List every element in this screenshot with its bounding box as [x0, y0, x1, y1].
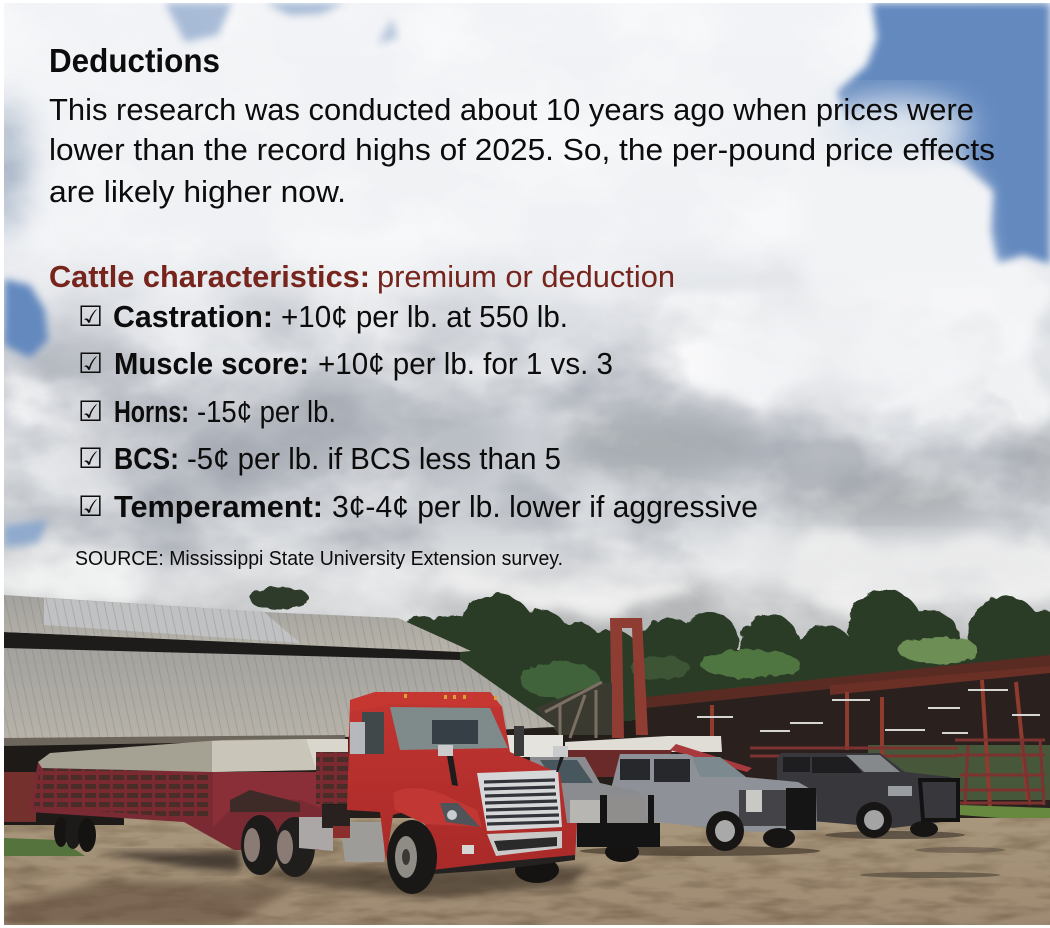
wooden lean-to — [535, 682, 612, 738]
shed on right — [640, 655, 1050, 820]
trailer body — [29, 762, 322, 850]
green gap behind shed — [868, 745, 1050, 800]
barn lower roof — [4, 648, 555, 741]
cab and hood — [347, 692, 577, 872]
item: castration — [78, 300, 568, 334]
item: muscle score: +10¢ per lb. for 1 vs. 3 — [318, 347, 613, 381]
gooseneck — [213, 772, 320, 828]
base behind scene — [124, 650, 738, 818]
item: muscle score — [78, 347, 613, 381]
barn — [4, 595, 555, 825]
ground — [4, 818, 1050, 925]
item: castration: ☑ — [78, 300, 103, 333]
item: horns — [78, 395, 336, 429]
white trailer tops behind trucks — [306, 735, 752, 777]
visor lights — [404, 694, 497, 700]
ground texture — [4, 818, 1050, 925]
silver pickup truck — [612, 754, 817, 851]
grass — [960, 805, 1050, 818]
sky — [0, 3, 1050, 663]
grille — [477, 770, 562, 831]
trailer canopy — [38, 739, 316, 772]
blue sky: lower left gap — [4, 520, 48, 547]
subheading: cattle characteristics: Cattle characteristics: — [49, 259, 370, 294]
pine tree behind barn — [249, 587, 309, 609]
dark pickup truck — [777, 753, 958, 838]
title: Deductions: Deductions — [49, 42, 220, 79]
fender line — [393, 788, 482, 827]
tree line — [249, 587, 1050, 720]
intro text: are likely higher now. — [49, 174, 346, 209]
rear trailer section — [316, 752, 348, 804]
blue sky: upper right — [837, 3, 1050, 264]
intro text: This research was conducted about 10 years ago when prices were — [49, 92, 974, 127]
item: horns: Horns: — [114, 395, 189, 429]
intro text — [49, 92, 995, 209]
trailer wheels — [54, 817, 68, 847]
cloud texture — [4, 119, 1050, 650]
headlight — [440, 803, 480, 827]
subheading: cattle characteristics: premium or deduction — [377, 259, 675, 294]
bright cloud over right side — [772, 309, 990, 424]
white cloud edge — [800, 116, 1010, 284]
cab visor — [350, 692, 502, 712]
item: muscle score: ☑ — [78, 347, 103, 380]
fender and steps — [299, 817, 333, 851]
rear right wheel — [515, 857, 559, 883]
cattle pens — [750, 740, 1045, 805]
cloud glow around text — [820, 98, 970, 158]
tree highlights — [520, 662, 600, 698]
source note: SOURCE: Mississippi State University Extension survey. — [75, 548, 563, 570]
ground shadows — [4, 831, 1005, 925]
blue wisps along top — [165, 3, 345, 42]
barn upper roof — [4, 595, 471, 652]
intro text: lower than the record highs of 2025. So, the per-pound price effects — [49, 132, 995, 167]
windshield — [390, 707, 508, 750]
gray pickup truck — [530, 757, 660, 862]
item: temperament: ☑ — [78, 490, 103, 523]
blue wisp — [378, 18, 398, 44]
item: temperament — [78, 490, 758, 524]
item: temperament: 3¢-4¢ per lb. lower if aggressive — [332, 490, 758, 524]
item: muscle score: Muscle score: — [114, 347, 309, 381]
livestock trailer — [29, 739, 348, 852]
item: BCS: ☑ — [78, 442, 103, 475]
side window — [362, 712, 384, 754]
item: castration: Castration: — [113, 300, 273, 334]
cloud shadows — [0, 100, 1050, 619]
chrome bumper — [487, 831, 562, 856]
red light tower — [610, 618, 648, 738]
cloud highlights — [0, 255, 1050, 611]
item: BCS: -5¢ per lb. if BCS less than 5 — [187, 442, 561, 476]
subheading: cattle characteristics — [49, 259, 675, 294]
drive wheels — [241, 815, 279, 875]
pale cloud above horizon — [760, 534, 932, 592]
item: castration: +10¢ per lb. at 550 lb. — [281, 300, 568, 334]
item: BCS: BCS: — [114, 442, 179, 476]
front wheel — [387, 820, 437, 894]
item: horns: ☑ — [78, 395, 103, 428]
fog light — [462, 845, 474, 854]
red semi truck — [241, 692, 577, 894]
item: temperament: Temperament: — [114, 490, 323, 524]
mirrors and exhaust — [350, 722, 365, 754]
list: cattle traits — [78, 300, 758, 524]
grass left — [4, 838, 85, 856]
blue sky: left gap — [4, 279, 48, 358]
item: horns: -15¢ per lb. — [197, 395, 336, 429]
cloud grey texture — [4, 260, 1050, 600]
